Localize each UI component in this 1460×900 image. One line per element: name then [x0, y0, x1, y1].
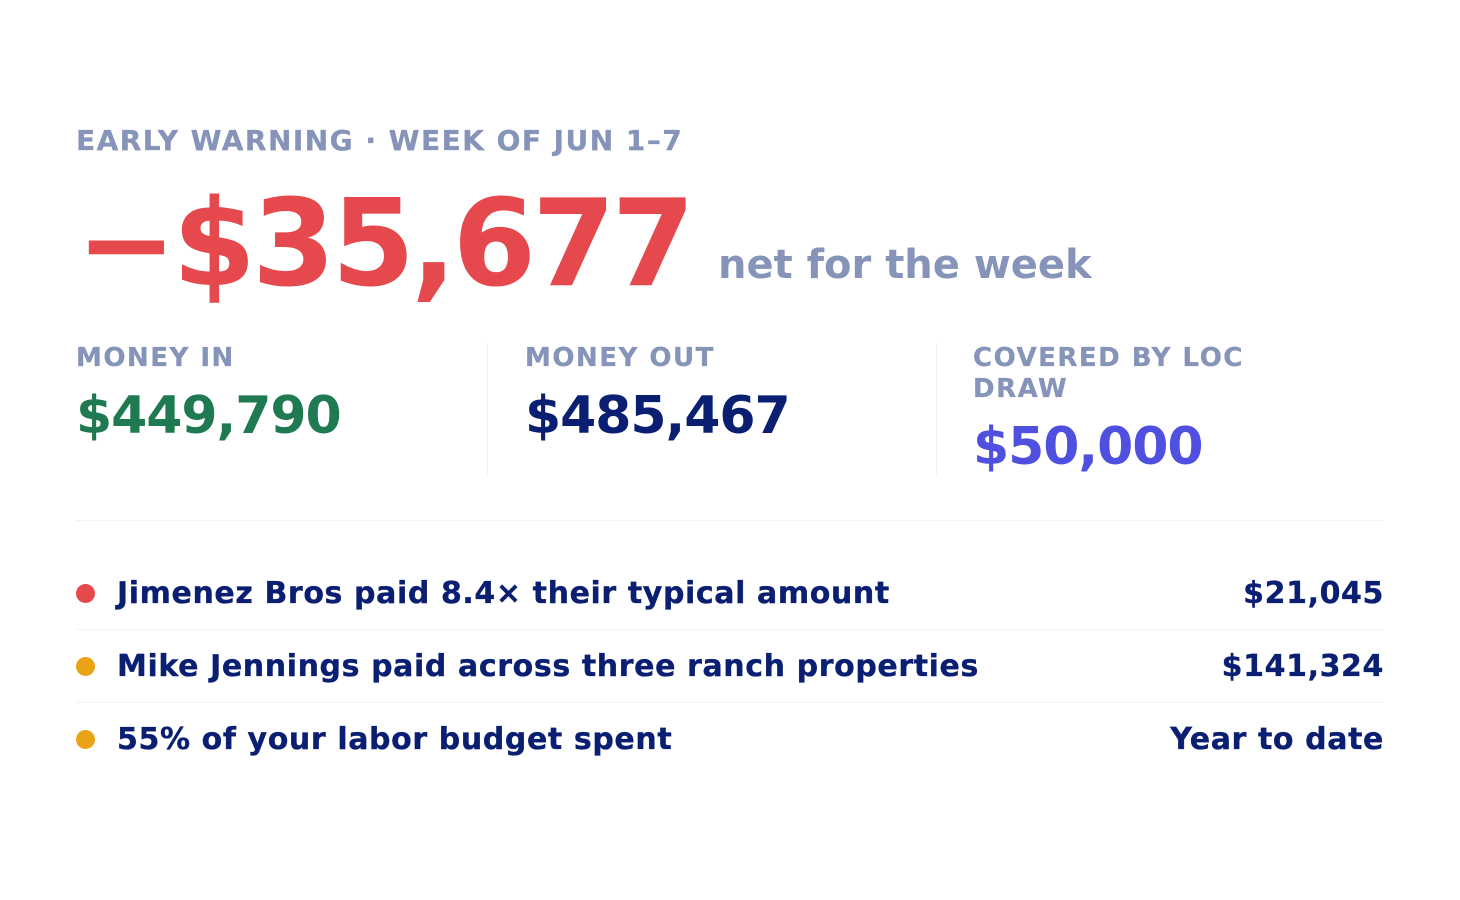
alert text: Jimenez Bros paid 8.4× their typical amount [117, 576, 890, 611]
label: covered by LOC draw: COVERED BY LOC [973, 343, 1244, 373]
label: covered by LOC draw [973, 343, 1244, 404]
label: money in: MONEY IN [76, 343, 235, 373]
alert row: Mike Jennings [76, 649, 1384, 684]
alert amount: $21,045 [1243, 576, 1384, 611]
stat: money in [76, 343, 341, 446]
alert text: 55% of your labor budget spent [117, 722, 672, 757]
headline: net amount: −$35,677 [76, 175, 691, 314]
alert row: Jimenez Bros [76, 576, 1384, 611]
alert amount: $141,324 [1222, 649, 1384, 684]
headline caption: net for the week [718, 242, 1092, 288]
label: covered by LOC draw: DRAW [973, 374, 1068, 404]
alert text: Mike Jennings paid across three ranch properties [117, 649, 979, 684]
alert period: Year to date [1170, 722, 1384, 757]
label: money out: MONEY OUT [525, 343, 715, 373]
value: money out: $485,467 [525, 386, 790, 446]
status dot: amber [76, 730, 95, 749]
stat: covered by LOC draw [973, 343, 1244, 477]
alert row: labor budget [76, 722, 1384, 757]
value: money in: $449,790 [76, 386, 341, 446]
status dot: red [76, 584, 95, 603]
value: covered by LOC draw: $50,000 [973, 417, 1202, 477]
status dot: amber [76, 657, 95, 676]
eyebrow: EARLY WARNING · WEEK OF JUN 1–7 [76, 124, 683, 157]
stat: money out [525, 343, 790, 446]
